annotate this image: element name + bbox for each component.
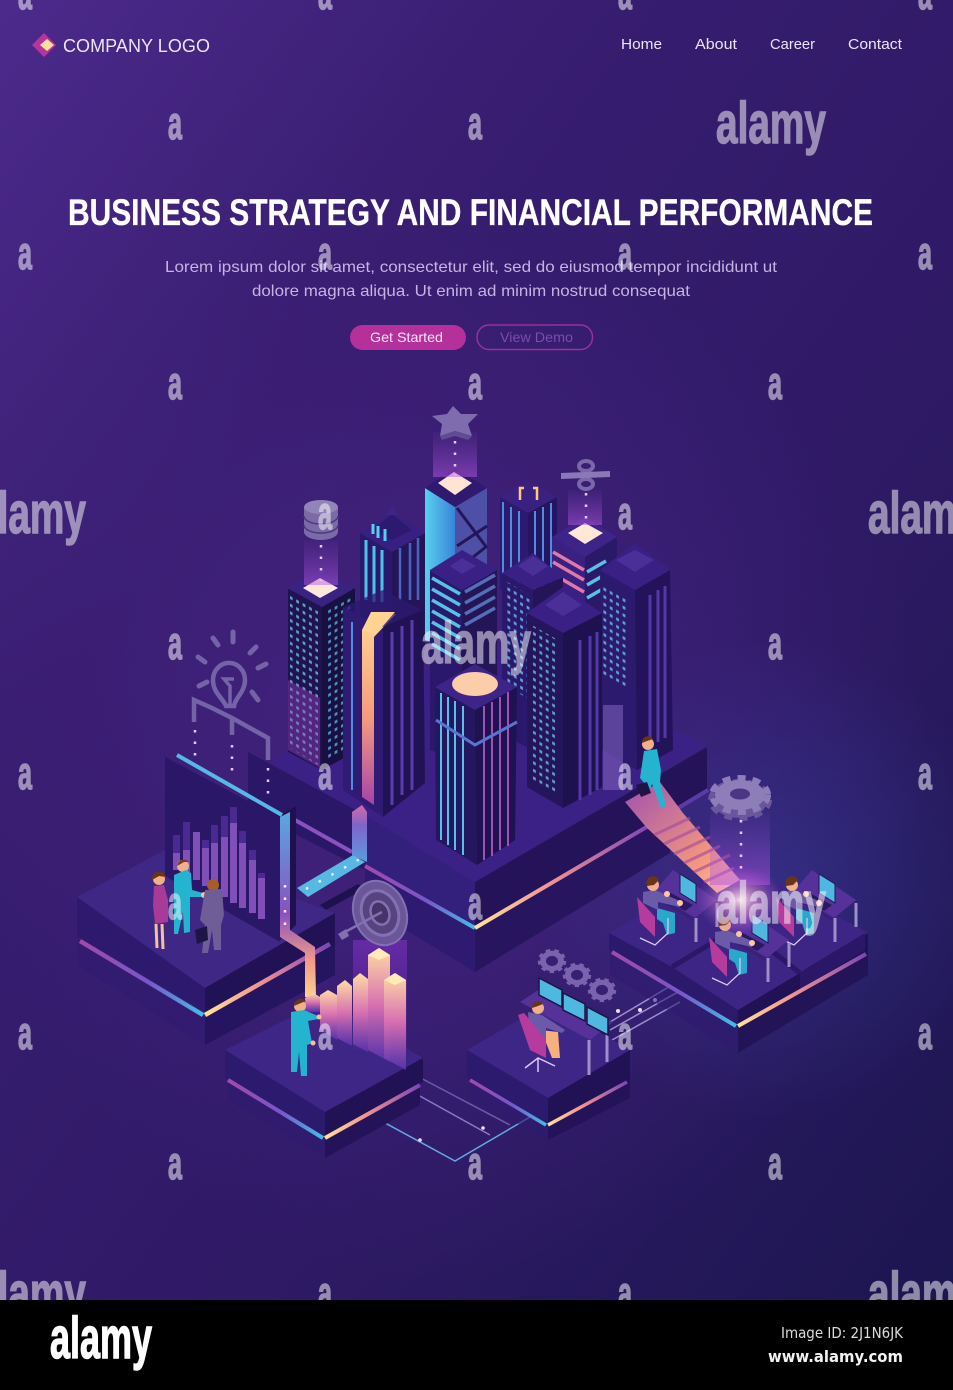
connecting light channel [297,805,367,910]
rising bar chart [305,940,407,1070]
operator desk and monitors [518,978,613,1075]
building: front round-top tower [435,664,517,865]
small a marks: a [918,227,932,279]
small a marks: a [768,357,782,409]
tile side faces [672,926,865,990]
nav links: About [695,36,738,53]
small a marks: a [618,1007,632,1059]
platform: handshake team [77,755,335,1045]
icon: gear with beam [710,778,770,885]
strip light dots [284,885,286,933]
small a marks: a [168,617,182,669]
entrance light in right gap [603,705,623,790]
small a marks: a [618,487,632,539]
panel bars [173,807,265,919]
light glow over stairs [696,866,784,934]
large alamy marks: alamy [421,611,531,676]
platform: office workers [609,860,868,1053]
glowing edge [80,941,330,1015]
navigation bar [32,33,903,57]
subtitle: dolore magna aliqua. Ut enim ad minim nostrud consequat [252,283,691,300]
small a marks: a [18,1007,32,1059]
small a marks: a [918,1007,932,1059]
nav links: Home [621,36,662,53]
small a marks: a [618,747,632,799]
building: window tower with glowing beam on top [287,570,355,770]
building: back right tower [600,543,673,770]
company logo [32,33,210,57]
building: gold crown tower [500,481,557,600]
nav links: Career [770,36,815,53]
platform: desk operator [467,950,630,1140]
glowing edge [470,1080,627,1125]
small a marks: a [618,227,632,279]
button: get started: Get Started [370,329,443,345]
three gears [540,950,614,1001]
analyst person [291,999,322,1076]
team of three people [152,860,224,953]
small a marks: a [618,1267,632,1319]
nav links: Contact [848,36,903,53]
glowing edge [612,952,866,1026]
building: cyan striped tower [360,505,425,650]
small a marks: a [168,877,182,929]
footer alamy logo: alamy [50,1306,152,1371]
large alamy marks: alamy [716,91,826,156]
subtitle: Lorem ipsum dolor sit amet, consectetur elit, sed do eiusmod tempor incididunt ut [165,259,778,276]
small a marks: a [768,1137,782,1189]
large alamy marks: alamy [716,871,826,936]
small a marks: a [168,357,182,409]
woman [152,871,168,949]
staircase [625,782,740,893]
button: view demo: View Demo [500,329,573,345]
icon: percent [561,461,610,525]
small a marks: a [318,747,332,799]
icon: lightbulb with connectors [194,632,268,798]
footer bar [0,1300,953,1390]
image id: Image ID: 2J1N6JK [781,1324,904,1342]
circuit lines [330,985,680,1161]
website: www.alamy.com [768,1347,903,1366]
subtitle [165,259,778,300]
small a marks: a [468,1137,482,1189]
company logo: COMPANY LOGO [63,36,210,56]
small a marks: a [468,877,482,929]
small a marks: a [468,97,482,149]
building: tower with gold light strip [343,590,425,817]
small a marks: a [18,227,32,279]
icon: target with arrow [338,873,416,953]
man in teal suit [174,860,207,934]
glowing edge [228,1080,420,1138]
platform: analyst with bars [225,940,423,1158]
main platform base [248,640,708,972]
man in grey suit [195,879,224,953]
light strip [280,812,316,997]
button: view demo [477,325,592,350]
circuit light dots [337,998,657,1142]
small a marks: a [168,1137,182,1189]
building: grid windows tower [502,553,563,750]
building: pink striped tower [552,517,617,640]
small a marks: a [468,357,482,409]
nav links [621,36,903,53]
platform glowing edges [295,790,708,928]
small a marks: a [168,97,182,149]
small a marks: a [18,747,32,799]
small a marks: a [768,617,782,669]
button: get started [350,325,466,350]
building: front right tower [527,587,602,808]
building: blue glass tower with glowing top [425,468,487,650]
workers at desks [637,870,856,985]
icon: star [432,406,478,477]
icon: coin stack [304,500,338,585]
small a marks: a [318,1267,332,1319]
man climbing with briefcase [636,736,666,808]
building: striped windows tower [430,550,497,760]
chart panel [165,755,296,942]
small a marks: a [918,747,932,799]
small a marks: a [318,487,332,539]
small a marks: a [318,227,332,279]
small a marks: a [318,1007,332,1059]
